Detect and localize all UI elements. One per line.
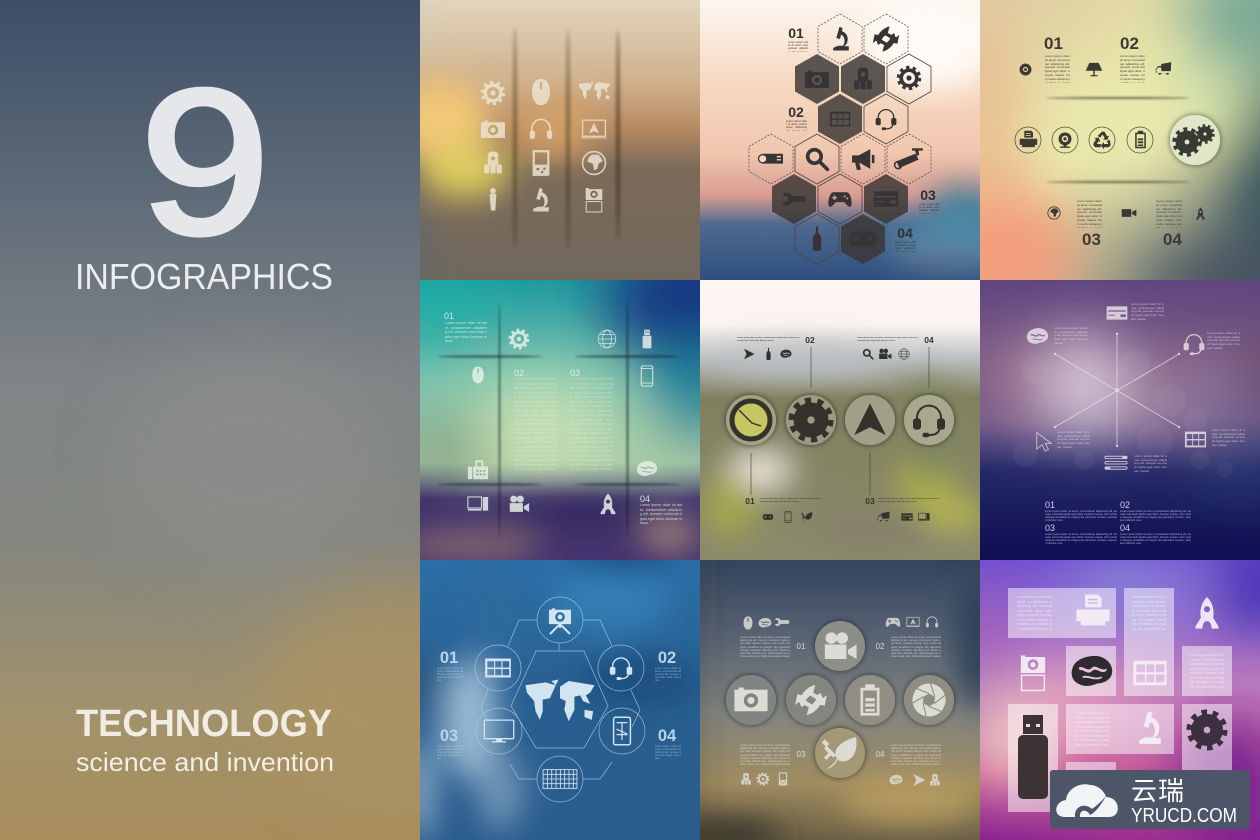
- icon: headset: [913, 406, 945, 437]
- step numbers: 01: [745, 496, 755, 506]
- hexagons: outlined: [795, 54, 931, 264]
- icon set: [468, 330, 657, 514]
- panel background: [980, 0, 1260, 280]
- icon: gear: [792, 401, 830, 439]
- step numbers: [440, 649, 677, 745]
- step numbers: 03: [865, 496, 875, 506]
- step numbers: 03: [570, 368, 580, 378]
- step texts: [437, 667, 681, 759]
- step numbers: 01: [444, 311, 454, 321]
- panel: six circles on dusk blur: [665, 560, 1004, 840]
- panel: radial diagram on purple bokeh: [980, 280, 1260, 560]
- step texts: Lorem ipsum dolor sit amet, consectetuer adipiscing elit. Aenean commodo ligula eget dolor. Aenean massa. Cum sociis natoque penatibus et magnis dis parturient montes, nascetur ridiculus mus.: [1120, 510, 1191, 522]
- heading: infographics: INFOGRAPHICS: [75, 256, 333, 297]
- connector lines: [751, 347, 929, 495]
- step numbers: 03: [1045, 523, 1055, 533]
- big gear circle: [1170, 115, 1220, 165]
- icon circles: [1015, 127, 1153, 153]
- step numbers: 04: [658, 727, 677, 745]
- panel background: [980, 280, 1260, 560]
- panel: teal grid with slits: [420, 280, 700, 560]
- text blocks: Lorem ipsum dolor sit amet, consectetuer adipiscing elit. Aenean commodo ligula eget dolor. Aenean massa.: [445, 321, 487, 343]
- step numbers: 03: [440, 727, 458, 745]
- panel: four dark circles on green blur: [700, 280, 987, 560]
- vertical slit shadows: [514, 28, 620, 250]
- text blocks: Lorem ipsum dolor sit amet, consectetuer adipiscing elit. Aenean commodo ligula eget dolor. Aenean massa.: [640, 503, 682, 525]
- step labels: 01: [788, 25, 804, 41]
- step numbers: 04: [1120, 523, 1130, 533]
- small icons: [1020, 62, 1205, 219]
- brand name chinese: 云瑞: [1131, 776, 1184, 806]
- tiles: [1008, 588, 1232, 812]
- step numbers: [1045, 500, 1130, 533]
- big number 9: 9: [140, 47, 270, 277]
- step texts: [1045, 510, 1191, 546]
- text blocks: [740, 636, 941, 767]
- panel background: [665, 560, 1004, 840]
- icon: gear: [1189, 712, 1225, 748]
- step numbers: [1044, 34, 1182, 249]
- panel: icon columns on warm blur: [420, 0, 700, 280]
- panel background: [700, 280, 987, 560]
- icon: cloud: [1056, 784, 1118, 817]
- step labels: 03: [920, 187, 936, 203]
- small icons: [741, 616, 940, 786]
- step numbers: 04: [876, 750, 885, 759]
- step texts: Lorem ipsum dolor sit amet, consectetuer adipiscing elit. Aenean commodo ligula eget dolor. Aenean massa. Cum sociis natoque penatibus et magnis dis parturient montes, nascetur ridiculus mus.: [1120, 533, 1191, 545]
- step numbers: 02: [876, 642, 885, 651]
- icon set: [1027, 306, 1206, 469]
- brand url: YRUCD.COM: [1131, 804, 1237, 827]
- icon set: [481, 79, 610, 212]
- step numbers: 01: [1044, 34, 1063, 53]
- step numbers: [745, 335, 934, 506]
- small captions: Lorem ipsum dolor sit amet, consectetuer adipiscing elit. Aenean commodo ligula eget dolor. Aenean massa.: [760, 498, 822, 502]
- step numbers: 04: [1163, 230, 1182, 249]
- hexagons: dashed: [749, 14, 931, 184]
- panel: hexagon grid: [700, 0, 1010, 280]
- callout texts: [1054, 303, 1245, 474]
- panel: left cover: [0, 0, 420, 840]
- badge icons: [734, 632, 946, 769]
- step numbers: 01: [1045, 500, 1055, 510]
- step numbers: 02: [1120, 500, 1130, 510]
- step numbers: [444, 311, 650, 504]
- icon: clock: [732, 401, 770, 439]
- step numbers: 01: [440, 649, 458, 667]
- step texts: Lorem ipsum dolor sit amet, consectetuer adipiscing elit. Aenean commodo ligula eget dolor. Aenean massa. Cum sociis natoque penatibus et magnis dis parturient montes, nascetur ridiculus mus.: [1045, 533, 1117, 545]
- step numbers: 02: [1120, 34, 1139, 53]
- step labels: [788, 25, 936, 241]
- icon: navigation arrow: [854, 403, 886, 435]
- text blocks: Lorem ipsum dolor sit amet, consectetuer adipiscing elit. Aenean commodo ligula eget dolor. Aenean massa. Cum sociis natoque penatibus et magnis dis parturient montes, nascetur ridiculus mus. Donec quam felis, ultricies nec, pellentesque eu, pretium quis, sem. Nulla consequat massa.: [740, 636, 790, 658]
- light icons: [1021, 594, 1219, 744]
- panel background: [971, 550, 1260, 840]
- small icons: [744, 348, 930, 523]
- text blocks: Lorem ipsum dolor sit amet, consectetuer adipiscing elit. Aenean commodo ligula eget dolor. Aenean massa. Cum sociis natoque penatibus et magnis dis parturient montes, nascetur ridiculus mus. Donec quam felis, ultricies nec, pellentesque eu, pretium quis, sem. Nulla consequat massa.: [891, 636, 941, 658]
- hexagon icons: [759, 26, 923, 251]
- step labels: 02: [788, 104, 804, 120]
- text blocks: Lorem ipsum dolor sit amet, consectetuer adipiscing elit. Aenean commodo ligula eget dolor. Aenean massa. Cum sociis natoque penatibus et magnis dis parturient montes, nascetur ridiculus mus. Donec quam felis, ultricies nec, pellentesque eu, pretium quis, sem. Nulla consequat massa.: [891, 744, 941, 766]
- slit shadows: [438, 302, 679, 538]
- panel background: [420, 280, 700, 560]
- icon set: [484, 608, 632, 788]
- small captions: Lorem ipsum dolor sit amet, consectetuer adipiscing elit. Aenean commodo ligula eget dolor. Aenean massa.: [737, 337, 800, 342]
- step numbers: [797, 642, 885, 759]
- panel background: [420, 0, 700, 280]
- icon: brain: [1072, 656, 1112, 686]
- watermark badge: [1050, 770, 1250, 829]
- text blocks: Lorem ipsum dolor sit amet, consectetuer adipiscing elit. Aenean commodo ligula eget dolor. Aenean massa. Cum sociis natoque penatibus et magnis dis parturient montes, nascetur ridiculus mus. Donec quam felis, ultricies nec, pellentesque eu, pretium quis, sem. Nulla consequat massa.: [740, 744, 790, 766]
- panel: icon row with big gear circle: [980, 0, 1260, 280]
- divider shadows: [1046, 97, 1190, 183]
- tile text: [1017, 595, 1224, 747]
- step numbers: 03: [1082, 230, 1101, 249]
- step captions: [786, 41, 939, 252]
- round badges: [726, 621, 954, 778]
- step numbers: 02: [805, 335, 815, 345]
- step numbers: 04: [640, 494, 650, 504]
- step numbers: 01: [797, 642, 806, 651]
- step numbers: 04: [924, 335, 934, 345]
- step texts: Lorem ipsum dolor sit amet, consectetuer adipiscing elit. Aenean commodo ligula eget dolor. Aenean massa. Cum sociis natoque penatibus et magnis dis parturient montes, nascetur ridiculus mus.: [1045, 510, 1117, 522]
- subheading: science and invention: [76, 747, 334, 777]
- heading: technology: TECHNOLOGY: [76, 703, 332, 745]
- panel background: [700, 0, 1010, 280]
- text blocks: [1045, 55, 1182, 228]
- small captions: Lorem ipsum dolor sit amet, consectetuer adipiscing elit. Aenean commodo ligula eget dolor. Aenean massa.: [857, 337, 919, 342]
- radial lines: [1054, 333, 1180, 447]
- step labels: 04: [897, 225, 913, 241]
- small captions: Lorem ipsum dolor sit amet, consectetuer adipiscing elit. Aenean commodo ligula eget dolor. Aenean massa.: [878, 498, 940, 502]
- icon: usb stick: [1018, 715, 1048, 799]
- cover background: [0, 0, 420, 840]
- small captions: [737, 337, 940, 504]
- panel: hexagon map diagram on blue blur: [414, 543, 700, 840]
- panel: tile grid on violet blur: [971, 550, 1260, 840]
- hexagon diagram lines: [475, 597, 645, 802]
- panel background: [414, 543, 700, 840]
- hexagons: dark: [772, 54, 908, 264]
- step numbers: 03: [797, 750, 806, 759]
- round badges: [726, 395, 954, 445]
- text blocks: [445, 321, 682, 528]
- step numbers: 02: [514, 368, 524, 378]
- step numbers: 02: [658, 649, 676, 667]
